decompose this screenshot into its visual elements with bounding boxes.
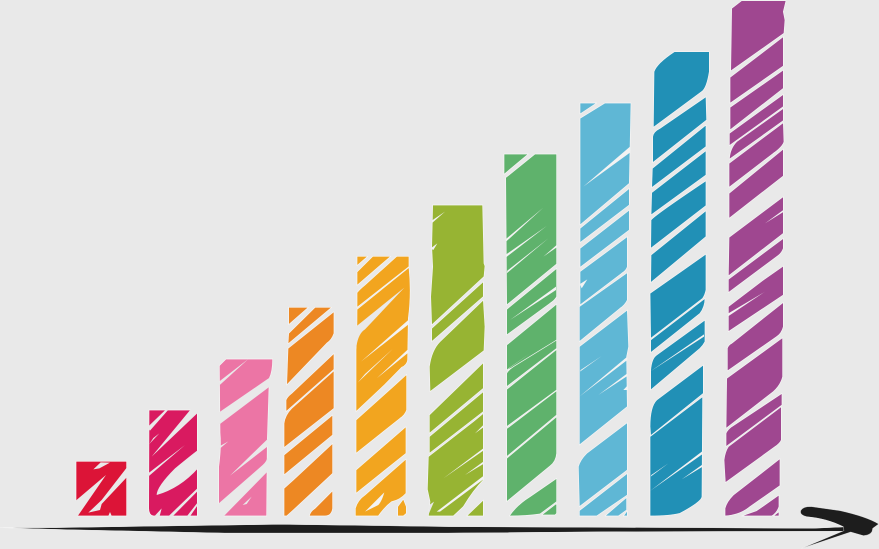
bar 5: amber bbox=[355, 256, 410, 516]
bar 10: purple bbox=[724, 1, 786, 516]
bar 1: red bbox=[75, 461, 128, 517]
arrow shaft bbox=[0, 524, 858, 533]
x axis arrow bbox=[0, 507, 879, 548]
bar 9: deep blue bbox=[650, 52, 709, 516]
bar 4: orange bbox=[284, 307, 334, 516]
arrow head bbox=[800, 507, 879, 548]
bar 6: olive green bbox=[427, 205, 485, 516]
bar 3: pink bbox=[217, 359, 274, 517]
bar 8: light blue bbox=[578, 103, 631, 516]
bar 7: green bbox=[504, 154, 557, 516]
bar 2: crimson bbox=[147, 409, 199, 517]
